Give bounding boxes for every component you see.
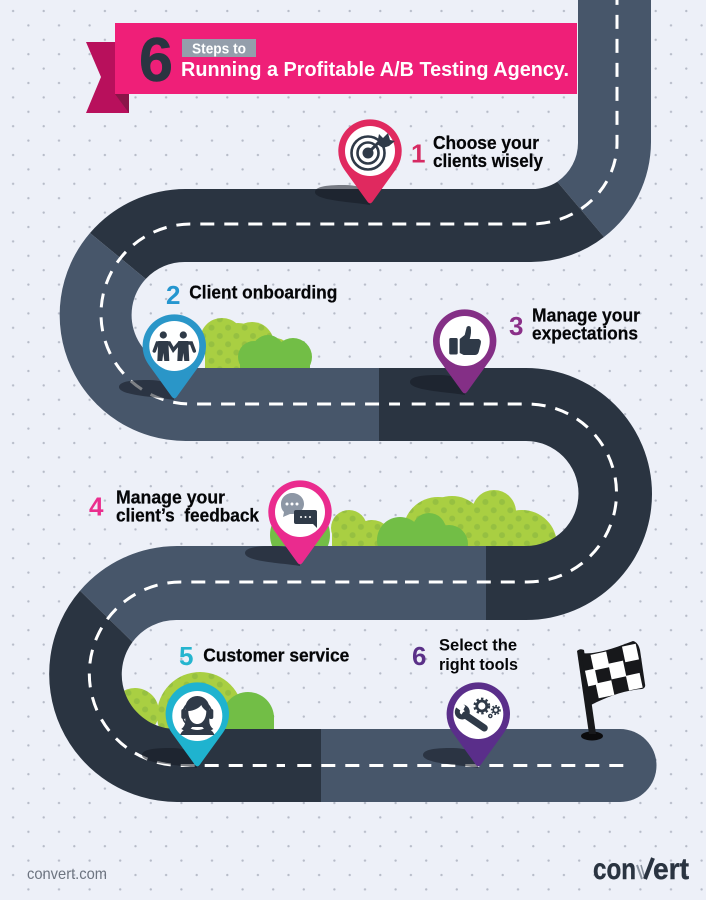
step 1 label: [411, 132, 544, 171]
title banner: 6: [139, 26, 173, 95]
pin 4: chat bubbles icon: [268, 480, 332, 564]
step 1 label: clients wisely: [433, 150, 544, 171]
step 2 label: [166, 280, 337, 310]
step 5 label: 5: [179, 641, 193, 671]
finish flag: [577, 641, 645, 740]
step 4 label: 4: [89, 492, 104, 522]
bush behind step 2: [200, 318, 312, 376]
pin 3: thumbs up icon: [433, 309, 496, 393]
website url: convert.com: [27, 866, 107, 883]
step 5 label: Customer service: [203, 645, 349, 666]
step 4 label: client’s feedback: [116, 505, 260, 526]
step 2 label: Client onboarding: [189, 281, 337, 302]
road centre dashes: [89, 0, 623, 766]
pin shadows: [119, 185, 478, 768]
bushes behind step 5: [111, 672, 274, 758]
pin 6: wrench and gears icon: [447, 682, 510, 766]
step 4 label: Manage your: [116, 486, 225, 507]
step 2 label: 2: [166, 280, 180, 310]
winding road: [49, 0, 656, 802]
step 6 label: Select the: [439, 636, 517, 655]
step 1 label: 1: [411, 139, 425, 169]
step 3 label: 3: [509, 311, 523, 341]
convert logo: ert: [653, 853, 689, 886]
step 6 label: 6: [412, 641, 426, 671]
title banner: Running a Profitable A/B Testing Agency.: [181, 58, 569, 81]
title banner: Steps to: [192, 41, 246, 57]
step 3 label: [509, 305, 640, 343]
step 4 label: [89, 486, 260, 526]
title banner: [86, 23, 577, 113]
step 3 label: Manage your: [532, 305, 640, 326]
step 5 label: [179, 641, 349, 671]
pin 1: target icon: [338, 119, 402, 203]
step 6 label: right tools: [439, 655, 518, 674]
step 6 label: [412, 636, 518, 674]
pin 2: two people icon: [143, 314, 206, 398]
pin 5: headset agent icon: [166, 682, 229, 766]
bushes behind step 4: [270, 490, 557, 580]
banner ribbon tail: [86, 42, 129, 113]
step 3 label: expectations: [532, 322, 638, 343]
convert logo: [593, 853, 689, 886]
step 1 label: Choose your: [433, 132, 539, 153]
convert logo: con: [593, 853, 636, 886]
